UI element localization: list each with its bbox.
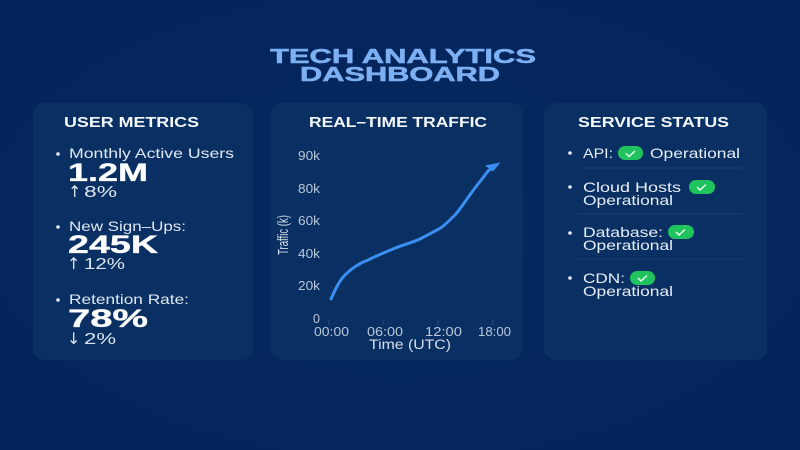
metric: monthly active users: Monthly Active Users: [69, 145, 234, 161]
metric: new sign-ups: 12%: [84, 256, 125, 273]
status: database: [568, 224, 694, 253]
y axis labels: 60k: [298, 214, 321, 228]
metric: retention rate: 2%: [84, 331, 116, 348]
line chart: [275, 149, 511, 352]
status: api: API:: [583, 145, 613, 161]
status: cloud hosts: Cloud Hosts: [583, 179, 681, 195]
title: DASHBOARD: [300, 64, 500, 86]
y axis title: Traffic (k): [275, 215, 292, 255]
y axis labels: 80k: [298, 182, 321, 196]
metric: new sign-ups: [56, 218, 186, 273]
panel: user metrics: [33, 103, 253, 360]
metric: monthly active users: 8%: [84, 184, 117, 201]
status: cdn: CDN:: [583, 270, 625, 286]
status: cdn: Operational: [583, 283, 673, 299]
status: cloud hosts: Operational: [583, 192, 673, 208]
traffic line: [331, 166, 495, 299]
status: cloud hosts: [568, 179, 715, 208]
status: cdn: [568, 270, 673, 299]
metric: monthly active users: 1.2M: [68, 159, 148, 187]
status: database: Database:: [583, 224, 663, 240]
metric: retention rate: Retention Rate:: [69, 291, 189, 307]
x axis labels: 18:00: [478, 325, 511, 339]
metric: new sign-ups: New Sign–Ups:: [69, 218, 186, 234]
heading: real-time traffic: REAL–TIME TRAFFIC: [309, 115, 488, 131]
metric: new sign-ups: ↑: [67, 254, 80, 273]
heading: user metrics: USER METRICS: [64, 115, 199, 131]
status: api: [568, 145, 740, 161]
y axis labels: 90k: [298, 149, 321, 163]
y axis labels: 20k: [298, 279, 321, 293]
x axis labels: 00:00: [314, 325, 349, 339]
y axis labels: 40k: [298, 247, 321, 261]
metric: monthly active users: [56, 145, 234, 201]
metric: new sign-ups: 245K: [68, 231, 158, 259]
x axis labels: [314, 325, 511, 339]
status: api: Operational: [650, 145, 740, 161]
metric: retention rate: [56, 291, 189, 348]
panel: service status: [544, 103, 767, 360]
metric: monthly active users: ↑: [68, 182, 81, 201]
y axis labels: 0: [313, 312, 320, 326]
arrow head: [485, 162, 500, 172]
panel: real-time traffic: [271, 103, 523, 360]
metric: retention rate: 78%: [68, 305, 148, 333]
y axis labels: [298, 149, 321, 326]
title: TECH ANALYTICS: [270, 46, 536, 68]
x axis labels: 12:00: [425, 325, 462, 339]
metric: retention rate: ↓: [67, 329, 80, 348]
x axis labels: 06:00: [367, 325, 403, 339]
title: [270, 46, 536, 86]
x axis title: Time (UTC): [369, 337, 451, 352]
status: database: Operational: [583, 237, 673, 253]
heading: service status: SERVICE STATUS: [578, 115, 729, 131]
